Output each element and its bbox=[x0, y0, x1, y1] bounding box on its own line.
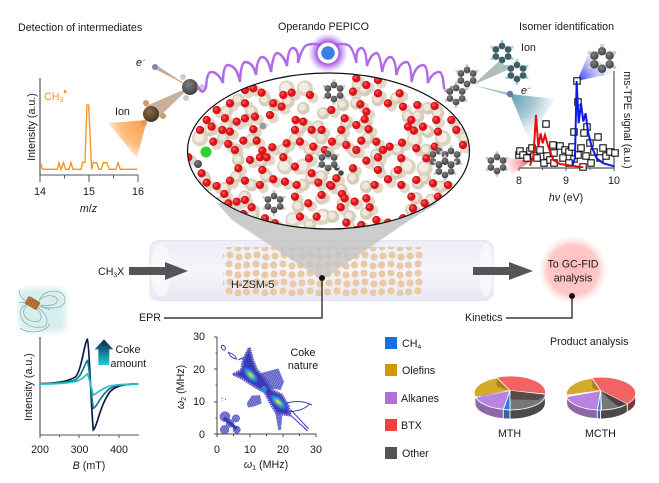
tick labels: 300 bbox=[71, 444, 88, 456]
label e-: − bbox=[527, 86, 531, 92]
ion cone bbox=[473, 62, 512, 85]
red isomer molecule bbox=[486, 151, 508, 177]
x axis label: hν (eV) bbox=[549, 192, 583, 204]
EPR connector bbox=[164, 275, 325, 318]
red isomer cone bbox=[503, 157, 531, 174]
molecule: polycyclic coke bbox=[428, 145, 462, 181]
EPR curve light bbox=[40, 374, 138, 395]
molecules parent bbox=[444, 64, 478, 108]
y tick 10: 10 bbox=[193, 396, 205, 408]
ellipse outline bbox=[188, 73, 470, 229]
legend item BTX: BTX bbox=[401, 420, 422, 432]
panel: 2D HYSCORE contour bbox=[175, 331, 322, 472]
EPR curve dark bbox=[40, 339, 138, 430]
ionization of methyl radical: ion and electron bbox=[108, 57, 205, 158]
methyl halide carbon bbox=[194, 160, 202, 168]
electron cone bbox=[510, 94, 556, 138]
y axis label: ms-TPE signal (a.u.) bbox=[621, 71, 633, 169]
panel: mass spectrum of intermediates bbox=[26, 78, 144, 215]
purple wave bbox=[198, 44, 451, 92]
label: EPR: EPR bbox=[139, 312, 161, 324]
electron cone bbox=[153, 65, 190, 87]
x tick labels: 10 bbox=[244, 444, 256, 456]
heading: Operando PEPICO: Operando PEPICO bbox=[278, 21, 369, 33]
x axis label: m/z bbox=[80, 203, 98, 215]
y tick 20: 20 bbox=[193, 364, 205, 376]
y axis label: Intensity (a.u.) bbox=[26, 93, 38, 161]
tick labels: 200 bbox=[31, 444, 49, 456]
legend item Olefins: Olefins bbox=[402, 365, 435, 377]
legend item CH4: 4 bbox=[417, 344, 421, 351]
tick labels: 14 bbox=[34, 186, 46, 198]
heading: Isomer identification: Isomer identification bbox=[519, 21, 614, 33]
tick labels: 400 bbox=[110, 444, 128, 456]
legend item Alkanes: Alkanes bbox=[401, 393, 439, 405]
label e-: e bbox=[521, 85, 527, 97]
pie label MCTH: MCTH bbox=[585, 428, 616, 440]
CH3 radical label: 3 bbox=[59, 97, 63, 104]
heading: Detection of intermediates: Detection of intermediates bbox=[18, 22, 142, 34]
label: Coke nature: Coke bbox=[291, 347, 315, 359]
y tick 30: 30 bbox=[193, 331, 205, 343]
axes bbox=[519, 71, 614, 171]
label: e-: e bbox=[136, 57, 142, 69]
axes bbox=[214, 337, 316, 437]
coil bbox=[24, 296, 41, 310]
zeolite magnified view bbox=[187, 73, 470, 233]
catalyst bed beads bbox=[223, 247, 423, 296]
field lines bbox=[19, 290, 65, 332]
label: H-ZSM-5: H-ZSM-5 bbox=[231, 279, 274, 291]
arrow: outlet bbox=[473, 262, 533, 280]
label: CH3X: 3 bbox=[113, 272, 117, 279]
cones from methyl bbox=[146, 87, 190, 121]
legend item CH4: CH bbox=[402, 338, 417, 350]
electron sphere bbox=[507, 91, 513, 97]
red curve bbox=[530, 115, 583, 167]
x axis label: (MHz) bbox=[256, 459, 288, 471]
x axis label: ω bbox=[244, 459, 252, 471]
tick labels: 15 bbox=[83, 186, 95, 198]
axes bbox=[40, 337, 139, 438]
molecule: benzene in pore bbox=[322, 79, 346, 105]
light source bbox=[308, 33, 348, 73]
label Ion: Ion bbox=[521, 42, 536, 54]
y axis label: 2 bbox=[181, 397, 188, 401]
electron sphere bbox=[152, 64, 158, 70]
x tick labels: 30 bbox=[310, 444, 322, 456]
x tick labels: 0 bbox=[214, 444, 220, 456]
x tick labels: 20 bbox=[277, 444, 289, 456]
y axis label: (MHz) bbox=[175, 365, 187, 397]
kinetics connector bbox=[506, 293, 575, 318]
heading: Product analysis: Product analysis bbox=[550, 336, 628, 348]
legend bbox=[385, 337, 439, 460]
tick labels bbox=[31, 444, 128, 456]
blue isomer molecule bbox=[588, 44, 616, 76]
teal ion molecules bbox=[490, 40, 528, 85]
pie chart: MCTH bbox=[566, 377, 636, 440]
reactor tube bbox=[150, 240, 493, 300]
panel: isomer identification spectrum bbox=[444, 40, 633, 204]
methyl in pore bbox=[260, 122, 268, 130]
ion cone bbox=[108, 120, 147, 158]
label: Coke amount: amount bbox=[110, 358, 146, 370]
axes bbox=[40, 78, 138, 182]
x axis label: B (mT) bbox=[73, 460, 105, 472]
icon: EPR coil and field lines bbox=[19, 288, 66, 332]
spectrum trace bbox=[40, 105, 137, 169]
tube left opening bbox=[151, 243, 171, 297]
tick labels bbox=[516, 175, 620, 187]
synchrotron wave undulator bbox=[198, 33, 451, 92]
blue curve bbox=[572, 81, 614, 166]
methyl ball bbox=[180, 74, 205, 101]
y axis label: Intensity (a.u.) bbox=[23, 353, 35, 421]
label: CH3X: X bbox=[117, 266, 124, 278]
methyl ion ball bbox=[141, 100, 166, 126]
y tick 0: 0 bbox=[199, 429, 205, 441]
molecule: styrene-like in pore bbox=[316, 148, 344, 176]
pie label MTH: MTH bbox=[498, 428, 521, 440]
x tick labels bbox=[214, 444, 322, 456]
GC-FID circle bbox=[538, 235, 608, 305]
legend item CH4 bbox=[385, 337, 421, 351]
electron path bbox=[473, 85, 510, 96]
label: CH3X: CH bbox=[98, 266, 113, 278]
label: Coke amount: Coke bbox=[116, 344, 140, 356]
CH3 radical label: • bbox=[63, 87, 67, 98]
label: Kinetics: Kinetics bbox=[465, 312, 502, 324]
label: Coke nature: nature bbox=[288, 360, 318, 372]
tick labels: 16 bbox=[132, 186, 144, 198]
contours bbox=[220, 345, 312, 434]
tick labels: 8 bbox=[516, 175, 522, 187]
pie chart: MTH bbox=[474, 376, 546, 440]
tick labels bbox=[34, 186, 144, 198]
GC-FID text: analysis bbox=[554, 272, 592, 284]
arrow: coke amount bbox=[95, 339, 113, 365]
molecule: cyclopentadiene-like bbox=[262, 190, 286, 216]
label: e-: − bbox=[142, 58, 146, 64]
data squares bbox=[516, 78, 618, 170]
panel: EPR chart bbox=[23, 337, 146, 472]
tick labels: 10 bbox=[608, 175, 620, 187]
x axis label: 1 bbox=[252, 465, 256, 472]
CH3 radical label: CH bbox=[44, 91, 59, 103]
arrow: inlet bbox=[129, 262, 188, 280]
y axis label: ω bbox=[175, 401, 187, 409]
green halide atom bbox=[200, 146, 212, 158]
EPR curve mid bbox=[40, 361, 138, 408]
label: Ion: Ion bbox=[115, 106, 130, 118]
GC-FID text: To GC-FID bbox=[547, 258, 599, 270]
zeolite framework bbox=[187, 77, 466, 233]
magnification cone bbox=[217, 203, 438, 280]
tube right opening bbox=[479, 243, 493, 297]
legend item Other: Other bbox=[402, 448, 429, 460]
blue isomer cone bbox=[577, 55, 618, 81]
tick labels: 9 bbox=[563, 175, 569, 187]
